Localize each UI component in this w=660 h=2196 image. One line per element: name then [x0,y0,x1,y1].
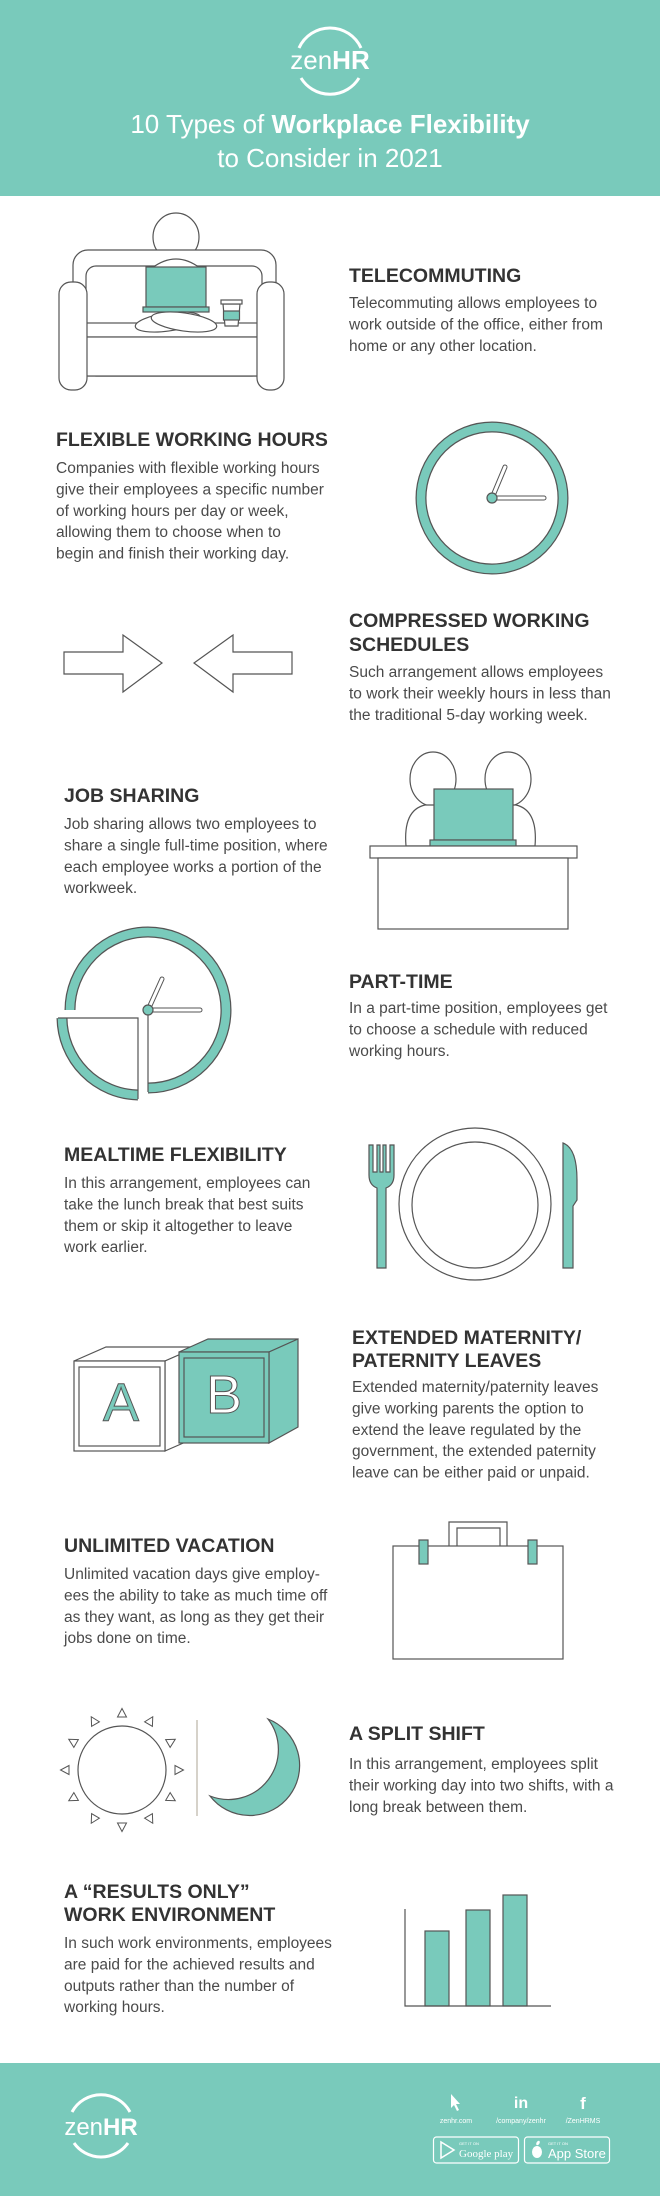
icon: A B blocks: B [206,1365,242,1425]
text: In such work environments, employees [64,1935,332,1952]
text: extend the leave regulated by the [352,1422,581,1439]
icon: facebook: /ZenHRMS [566,2118,601,2125]
heading: SCHEDULES [349,634,469,656]
icon: sun and moon [60,1708,300,1832]
text: give their employees a specific number [56,481,324,498]
logo [290,28,370,94]
icon: cursor website: zenhr.com [440,2118,472,2125]
text: Such arrangement allows employees [349,664,603,681]
text: each employee works a portion of the [64,859,322,876]
text: jobs done on time. [63,1630,191,1647]
icon: clock [421,427,563,569]
text: home or any other location. [349,338,537,355]
footer logo: zenHR [64,2114,138,2141]
text: begin and finish their working day. [56,546,289,563]
icon: facebook [566,2094,601,2125]
section: split shift [60,1708,614,1832]
heading: COMPRESSED WORKING [349,610,590,632]
heading: EXTENDED MATERNITY/ [352,1327,582,1349]
text: Extended maternity/paternity leaves [352,1379,599,1396]
text: work earlier. [63,1239,148,1256]
text: In this arrangement, employees can [64,1175,310,1192]
section: part-time [58,932,608,1099]
text: workweek. [63,880,137,897]
text: Job sharing allows two employees to [64,816,316,833]
icon: sofa with person [59,213,284,390]
icon: linkedin: /company/zenhr [496,2118,547,2125]
heading: A SPLIT SHIFT [349,1723,485,1745]
bar chart [405,1895,551,2006]
text: In this arrangement, employees split [349,1756,599,1773]
text: share a single full-time position, where [64,837,328,854]
section: unlimited vacation [63,1522,563,1659]
text: working hours. [348,1043,450,1060]
text: are paid for the achieved results and [64,1956,315,1973]
heading: JOB SHARING [64,785,199,807]
badge: app store: GET IT ON [548,2141,568,2146]
text: to work their weekly hours in less than [349,685,611,702]
heading: UNLIMITED VACATION [64,1535,275,1557]
heading: PART-TIME [349,971,453,993]
heading: A “RESULTS ONLY” [64,1881,250,1903]
icon: A B blocks: A [103,1373,139,1433]
title [130,109,530,173]
text: work outside of the office, either from [348,316,603,334]
section: telecommuting [59,213,603,390]
text: allowing them to choose when to [56,524,281,541]
footer logo [64,2095,138,2157]
text: long break between them. [349,1799,527,1816]
badge: google play: GET IT ON [459,2141,479,2146]
heading: FLEXIBLE WORKING HOURS [56,429,328,451]
text: take the lunch break that best suits [64,1196,304,1213]
title: to Consider in 2021 [217,143,443,173]
section: job sharing [63,752,577,929]
text: as they want, as long as they get their [64,1609,324,1626]
icon: briefcase [393,1522,563,1659]
text: ees the ability to take as much time off [64,1587,328,1604]
section: compressed working schedules [64,610,611,724]
icon: linkedin [496,2095,547,2125]
text: give working parents the option to [352,1400,584,1417]
icon: clock with missing quarter [58,932,226,1099]
badge: app store: App Store [548,2146,606,2161]
text: Unlimited vacation days give employ- [64,1566,320,1583]
footer [0,2063,660,2196]
icon: two people at desk [370,752,577,929]
text: Telecommuting allows employees to [349,295,597,312]
section: results only [63,1881,551,2016]
heading: WORK ENVIRONMENT [64,1904,275,1926]
text: to choose a schedule with reduced [349,1021,588,1038]
section: extended leaves [74,1327,599,1482]
badge: app store [524,2137,610,2163]
logo: zenHR [290,45,370,75]
text: In a part-time position, employees get [349,1000,608,1017]
text: their working day into two shifts, with a [349,1777,614,1794]
heading: MEALTIME FLEXIBILITY [64,1144,287,1166]
icon: linkedin: in [514,2095,528,2112]
text: leave can be either paid or unpaid. [352,1465,590,1482]
icon: arrows [64,635,292,692]
text: government, the extended paternity [352,1443,596,1460]
text: the traditional 5-day working week. [349,707,588,724]
title: 10 Types of Workplace Flexibility [130,109,530,139]
heading: TELECOMMUTING [349,265,521,287]
heading: PATERNITY LEAVES [352,1350,541,1372]
section: mealtime flexibility [63,1128,577,1280]
text: outputs rather than the number of [64,1978,295,1995]
text: working hours. [63,1999,165,2016]
text: of working hours per day or week, [56,503,289,520]
header [0,0,660,196]
icon: facebook: f [580,2094,586,2113]
section: flexible working hours [56,427,563,569]
icon: plate fork knife [369,1128,577,1280]
text: them or skip it altogether to leave [64,1218,292,1235]
icon: A B blocks [74,1339,298,1451]
icon: cursor website [440,2094,472,2125]
badge: google play: Google play [459,2148,514,2160]
text: Companies with flexible working hours [56,460,320,477]
badge: google play [434,2137,518,2163]
